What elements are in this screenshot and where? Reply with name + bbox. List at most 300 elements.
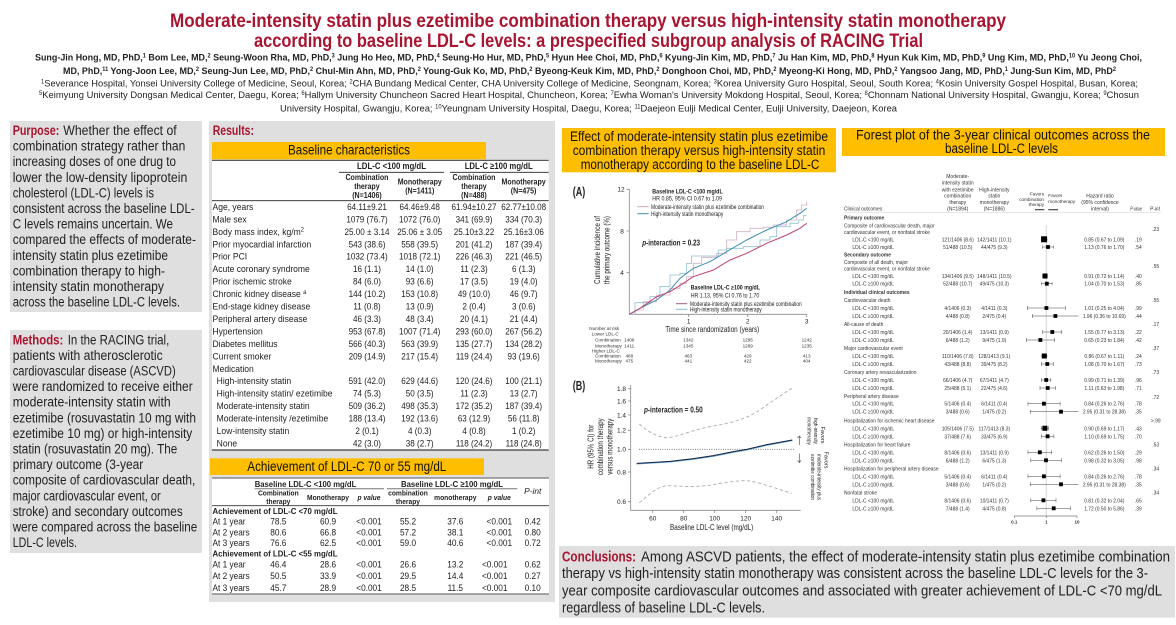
table: baseline characteristics: LDL-C ≥100 mg/dL: [465, 161, 533, 171]
forest column: combination events: 4/488 (0.8): [946, 314, 970, 320]
forest row labels: LDL-C ≥100 mg/dL: [852, 386, 894, 392]
forest column: p interaction: .72: [1152, 395, 1159, 401]
forest row labels: LDL-C <100 mg/dL: [852, 306, 894, 312]
achievement values: <0.001: [487, 527, 512, 538]
forest column: combination events: 6/488 (1.2): [946, 338, 970, 344]
column: combination LDL below 100: 543 (38.6): [349, 239, 386, 249]
axis tick labels: 1: [687, 318, 691, 325]
forest column: combination events: 121/1406 (8.6): [942, 237, 974, 243]
year labels: At 3 years: [212, 583, 250, 593]
heading: forest plot: Forest plot of the 3-year clinical outcomes across the: [856, 128, 1150, 142]
panel: purpose: combination strategy rather than: [13, 139, 185, 154]
table: achievement of LDL-C: Baseline LDL-C ≥100 mg/dL: [401, 479, 503, 489]
forest header: (95% confidence: [1081, 200, 1119, 206]
column: monotherapy LDL below 100: 153 (10.8): [401, 289, 438, 299]
forest header: intensity statin: [942, 180, 974, 187]
forest column: p value: .22: [1135, 330, 1142, 336]
forest header: High-intensity: [979, 187, 1010, 193]
axes: [628, 385, 801, 513]
forest column: combination events: 43/488 (8.8): [944, 362, 971, 368]
column: combination LDL below 100: 209 (14.9): [349, 351, 386, 361]
forest column: monotherapy events: 49/475 (10.3): [980, 281, 1009, 288]
forest column: p value: .54: [1135, 245, 1142, 251]
affiliations: University Hospital, Gwangju, Korea; 10Yeungnam University Hospital, Daegu, Korea; 11Daejeon Eulji Medical Center, Eulji University, Daejeon, Korea: [280, 103, 898, 114]
axis tick labels: 1.6: [617, 398, 626, 405]
column: monotherapy LDL below 100: 558 (39.5): [401, 239, 438, 249]
forest column: combination events: 5/1406 (0.4): [944, 401, 971, 408]
forest column: hazard ratios: 1.96 (0.36 to 10.69): [1083, 314, 1126, 320]
column: combination LDL below 100: 2 (0.1): [355, 426, 379, 436]
forest axis labels: 10: [1074, 520, 1080, 524]
column: monotherapy LDL below 100: 498 (35.3): [401, 401, 438, 411]
authors: MD, PhD,11 Yong-Joon Lee, MD,2 Seung-Jun Lee, MD, PhD,2 Chul-Min Ahn, MD, PhD,2 Young-Guk Ko, MD, PhD,2 Byeong-Keuk Kim, MD, PhD,2 Donghoon Choi, MD, PhD,2 Myeong-Ki Hong, MD, PhD,2 Yangsoo Jang, MD, PhD,1 Jung-Sun Kim, MD, PhD2: [63, 66, 1117, 77]
y axis title: the primary outcome (%): [602, 216, 611, 284]
forest column: combination events: 8/1406 (0.6): [944, 498, 971, 504]
forest row labels: LDL-C <100 mg/dL: [852, 401, 894, 408]
panel: methods: cardiovascular disease (ASCVD): [13, 364, 176, 378]
achievement values: 28.9: [320, 583, 336, 593]
achievement values: <0.001: [356, 571, 382, 581]
number at risk table: 475: [625, 359, 634, 364]
panel: methods: primary outcome (3-year: [13, 457, 144, 472]
table: achievement of LDL-C: Achievement of LDL-C <55 mg/dL: [212, 548, 338, 558]
forest row labels: LDL-C ≥100 mg/dL: [852, 458, 894, 464]
column: combination LDL below 100: [345, 201, 390, 449]
forest column: monotherapy events: 39/475 (8.2): [981, 362, 1008, 368]
row labels: High-intensity statin: [217, 376, 291, 386]
forest column: p value: .73: [1135, 362, 1142, 368]
table: baseline characteristics: therapy: [461, 182, 487, 191]
forest row labels: Peripheral artery disease: [844, 394, 899, 400]
number at risk table: 463: [684, 354, 693, 359]
table: baseline characteristics: (N=488): [461, 191, 487, 200]
achievement values: 14.4: [447, 571, 464, 581]
achievement values: 37.6: [447, 516, 464, 527]
table: baseline characteristics: (N=475): [511, 186, 537, 196]
forest column: combination events: 6/488 (1.2): [946, 458, 970, 464]
achievement values: <0.001: [356, 538, 382, 548]
achievement values: <0.001: [356, 583, 382, 593]
year labels: At 3 years: [212, 538, 250, 548]
column: combination LDL 100 or above: [452, 201, 497, 449]
forest column: hazard ratios: 0.98 (0.32 to 3.05): [1084, 458, 1125, 464]
forest plot: [844, 174, 1161, 525]
panel: methods: statin (rosuvastatin 20 mg). The: [13, 442, 177, 456]
number at risk table: 1408: [624, 338, 635, 343]
forest column: monotherapy events: 142/1411 (10.1): [977, 237, 1012, 243]
forest column: hazard ratios: 1.04 (0.70 to 1.53): [1084, 281, 1125, 288]
y axis title: Cumulative incidence of: [593, 215, 602, 284]
axis tick labels: [617, 186, 809, 325]
forest column: monotherapy events: 9/475 (1.9): [982, 338, 1006, 344]
forest row labels: LDL-C ≥100 mg/dL: [852, 245, 894, 251]
forest column: monotherapy events: 128/1413 (9.1): [978, 354, 1011, 360]
forest column: combination events: 25/488 (5.1): [944, 386, 971, 392]
annotation: favors combination: [809, 451, 828, 500]
forest header: [844, 174, 1161, 213]
forest column: hazard ratios: 1.72 (0.50 to 5.86): [1084, 506, 1125, 512]
authors: [35, 53, 1142, 77]
forest row labels: LDL-C <100 mg/dL: [852, 237, 894, 243]
column: monotherapy LDL 100 or above: 334 (70.3): [505, 214, 542, 225]
axis tick labels: 0.8: [617, 469, 626, 476]
row labels: Body mass index, kg/m2: [212, 227, 304, 237]
column: monotherapy LDL below 100: 4 (0.3): [408, 426, 432, 436]
panel: purpose: intensity statin plus ezetimibe: [13, 248, 168, 263]
column: combination LDL 100 or above: 201 (41.2): [456, 239, 493, 249]
forest column: combination events: 51/488 (10.5): [943, 245, 973, 251]
column: combination LDL 100 or above: 17 (3.5): [460, 276, 488, 287]
forest column: p value: .99: [1135, 306, 1142, 312]
column: combination LDL 100 or above: 118 (24.2): [456, 438, 492, 449]
panel: methods: Methods:: [13, 332, 63, 347]
forest column: hazard ratios: 0.90 (0.69 to 1.17): [1084, 426, 1125, 432]
column: monotherapy LDL below 100: 563 (39.9): [401, 338, 438, 349]
forest header: combination: [1019, 197, 1044, 202]
achievement values: <0.001: [482, 583, 508, 593]
forest row labels: LDL-C <100 mg/dL: [852, 274, 894, 280]
column: combination LDL 100 or above: 293 (60.0): [456, 326, 493, 337]
column: monotherapy LDL below 100: 13 (0.9): [406, 301, 434, 312]
axis tick labels: 80: [680, 516, 688, 523]
forest column: monotherapy events: 10/1411 (0.7): [980, 498, 1009, 504]
column: monotherapy LDL 100 or above: 1 (0.2): [512, 426, 536, 436]
forest column: p value: .85: [1135, 281, 1142, 288]
forest column: monotherapy events: 117/1413 (8.3): [978, 426, 1010, 432]
column: monotherapy LDL 100 or above: 56 (11.8): [508, 413, 540, 424]
column: monotherapy LDL 100 or above: 93 (19.6): [508, 351, 540, 361]
forest column: p interaction: >.99: [1151, 418, 1161, 424]
number at risk table: Number at risk: [589, 326, 620, 331]
forest column: monotherapy events: 44/475 (9.3): [981, 245, 1008, 251]
achievement values: [270, 516, 541, 593]
year labels: [212, 516, 250, 593]
column: monotherapy LDL below 100: 64.46±9.48: [399, 201, 440, 212]
chart A: cumulative incidence curves: [573, 185, 812, 364]
forest row labels: Hospitalization for ischemic heart disease: [844, 418, 935, 424]
forest header: interval): [1091, 206, 1109, 213]
row labels: Current smoker: [212, 351, 271, 361]
column: combination LDL below 100: 509 (36.2): [349, 401, 386, 411]
forest row labels: LDL-C ≥100 mg/dL: [852, 362, 894, 368]
panel: methods: In the RACING trial,: [68, 332, 169, 347]
row labels: Low-intensity statin: [217, 426, 289, 436]
axis tick labels: 140: [771, 516, 783, 523]
achievement values: 60.9: [320, 516, 336, 527]
table: baseline characteristics: [212, 160, 549, 450]
annotation: LDL 100 or above legend: HR 1.13, 95% CI 0.76 to 1.70: [691, 294, 760, 300]
column: combination LDL below 100: 144 (10.2): [349, 289, 386, 299]
column: monotherapy LDL below 100: 14 (1.0): [406, 264, 434, 274]
table: baseline characteristics: (N=1406): [352, 191, 382, 200]
column: combination LDL below 100: 11 (0.8): [353, 301, 381, 312]
forest column: p interaction: .53: [1152, 442, 1159, 448]
number at risk table: 1235: [802, 343, 812, 348]
achievement values: 11.5: [448, 583, 463, 593]
row labels: Moderate-intensity /ezetimibe: [217, 413, 328, 424]
table: baseline characteristics: (N=1411): [405, 186, 435, 196]
panel: purpose: [10, 121, 202, 312]
forest column: p interaction: [1151, 227, 1161, 496]
axis tick labels: 100: [709, 516, 721, 523]
forest column: p value: .40: [1135, 274, 1142, 280]
table: achievement of LDL-C: p value: [487, 494, 511, 502]
forest column: combination events: 37/488 (7.6): [944, 434, 971, 440]
forest column: combination events: 66/1406 (4.7): [943, 378, 973, 384]
table: achievement of LDL-C: [212, 478, 549, 594]
number at risk table: [589, 326, 812, 364]
panel letter B: (B): [573, 379, 585, 393]
annotation: favors combination: ezetimibe combination: [809, 454, 815, 500]
forest column: monotherapy events: 6/1411 (0.4): [981, 401, 1008, 408]
forest column: hazard ratios: 1.10 (0.69 to 1.75): [1084, 434, 1125, 440]
forest row labels: LDL-C <100 mg/dL: [852, 354, 894, 360]
results heading: Results:: [213, 123, 254, 138]
column: combination LDL 100 or above: 11 (2.3): [460, 264, 488, 274]
annotation: favors high-intensity: Favors: [819, 426, 825, 444]
achievement values: <0.001: [482, 571, 508, 581]
annotation: LDL 100 or above legend: Baseline LDL-C ≥100 mg/dL: [691, 286, 760, 292]
achievement values: <0.001: [482, 559, 508, 570]
column: combination LDL 100 or above: 20 (4.1): [460, 314, 488, 324]
panel: purpose: C levels remains uncertain. We: [13, 217, 173, 232]
number at risk table: 441: [684, 359, 693, 364]
panel: purpose: Purpose:: [13, 123, 59, 138]
forest column: p value: .71: [1135, 386, 1142, 392]
forest column: combination events: 105/1406 (7.5): [942, 426, 974, 432]
forest column: p interaction: .17: [1152, 322, 1159, 328]
panel: methods: patients with atherosclerotic: [13, 348, 163, 363]
forest column: hazard ratios: 0.85 (0.67 to 1.09): [1084, 237, 1125, 243]
forest column: p interaction: .37: [1152, 346, 1159, 352]
forest header: Moderate-: [946, 174, 969, 180]
column: combination LDL below 100: 953 (67.8): [349, 326, 386, 337]
column: monotherapy LDL below 100: 93 (6.6): [406, 276, 434, 287]
forest column: hazard ratios: 2.95 (0.31 to 28.38): [1083, 482, 1126, 488]
forest row labels: Secondary outcome: [844, 252, 891, 259]
panel: conclusions: regardless of baseline LDL-C levels.: [562, 600, 765, 616]
number at risk table: Monotherapy: [595, 343, 623, 348]
forest header: statin: [988, 193, 1000, 200]
number at risk table: 1295: [743, 338, 753, 343]
forest column: hazard ratios: 0.62 (0.26 to 1.50): [1084, 450, 1125, 456]
row labels: None: [217, 438, 237, 449]
column: combination LDL 100 or above: 119 (24.4): [456, 351, 492, 361]
forest column: p interaction: .34: [1152, 466, 1159, 472]
achievement values: 46.4: [270, 559, 287, 570]
forest axis labels: 1: [1045, 520, 1048, 524]
number at risk table: 1411: [624, 343, 635, 348]
forest column: monotherapy events: 67/1411 (4.7): [980, 378, 1009, 384]
row labels: High-intensity statin/ ezetimibe: [217, 388, 333, 399]
axis tick labels: 1.8: [617, 386, 626, 393]
axes: [626, 189, 807, 317]
column: monotherapy LDL below 100: 192 (13.6): [401, 413, 438, 424]
column: monotherapy LDL below 100: 25.06 ± 3.05: [397, 226, 442, 237]
forest column: hazard ratios: [1083, 237, 1126, 512]
heading: baseline characteristics: [212, 142, 486, 159]
year labels: At 2 years: [212, 527, 250, 538]
number at risk table: Monotherapy: [595, 359, 623, 364]
forest column: p value: .35: [1135, 482, 1142, 488]
affiliations: 5Keimyung University Dongsan Medical Center, Daegu, Korea; 6Hallym University Chuncheon Sacred Heart Hospital, Chuncheon, Korea; 7Ewha Woman's University Mokdong Hospital, Seoul, Korea; 8Chonnam National University Hospital, Gwangju, Korea; 9Chosun: [39, 90, 1139, 101]
axis tick labels: 1.0: [617, 447, 626, 454]
forest row labels: LDL-C ≥100 mg/dL: [852, 506, 894, 512]
achievement values: 0.42: [525, 516, 541, 527]
forest column: p value: .39: [1135, 506, 1142, 512]
forest header: combination: [944, 193, 971, 200]
column: combination LDL 100 or above: 120 (24.6): [456, 376, 493, 386]
annotation: LDL below 100 legend: Moderate-intensity statin plus ezetimibe combination: [651, 205, 764, 211]
forest column: monotherapy events: 4/475 (0.8): [982, 506, 1006, 512]
column: combination LDL below 100: 84 (6.0): [353, 276, 381, 287]
forest row labels: Primary outcome: [844, 215, 884, 221]
achievement values: 29.5: [400, 571, 416, 581]
forest row labels: LDL-C <100 mg/dL: [852, 330, 894, 336]
column: combination LDL 100 or above: 135 (27.7): [456, 338, 493, 349]
column: monotherapy LDL below 100: 1072 (76.0): [399, 214, 441, 225]
forest column: p value: .43: [1135, 426, 1142, 432]
forest row labels: Hospitalization for peripheral artery disease: [844, 466, 939, 472]
forest row labels: LDL-C <100 mg/dL: [852, 450, 894, 456]
y axis title: [586, 418, 614, 475]
forest row labels: LDL-C ≥100 mg/dL: [852, 434, 894, 440]
forest column: monotherapy events: 1/475 (0.2): [982, 482, 1006, 488]
table: baseline characteristics: therapy: [354, 182, 380, 191]
achievement values: 28.6: [320, 559, 336, 570]
forest column: combination events: 134/1406 (9.5): [942, 274, 974, 280]
column: combination LDL below 100: 566 (40.3): [349, 338, 386, 349]
y axis title: [593, 215, 611, 284]
forest column: monotherapy events: 1/475 (0.2): [982, 409, 1006, 416]
title: [170, 11, 1006, 52]
heading: forest plot: baseline LDL-C levels: [945, 141, 1058, 156]
panel: methods: were randomized to receive either: [12, 379, 193, 394]
forest row labels: LDL-C ≥100 mg/dL: [852, 482, 894, 488]
affiliations: [39, 79, 1139, 114]
panel: methods: moderate-intensity statin with: [13, 395, 171, 410]
forest column: hazard ratios: 0.99 (0.71 to 1.39): [1084, 378, 1125, 384]
forest column: hazard ratios: 0.86 (0.67 to 1.11): [1084, 354, 1124, 360]
forest row labels: LDL-C <100 mg/dL: [852, 498, 894, 504]
forest row labels: LDL-C ≥100 mg/dL: [852, 281, 894, 288]
forest column: p value: .70: [1135, 434, 1142, 440]
panel: purpose: intensity statin monotherapy: [13, 279, 164, 294]
column: combination LDL below 100: 16 (1.1): [353, 264, 381, 274]
forest column: hazard ratios: 1.13 (0.76 to 1.70): [1084, 245, 1125, 251]
column: combination LDL below 100: 46 (3.3): [353, 314, 381, 324]
row labels: Prior myocardial infarction: [212, 239, 311, 249]
forest row labels: LDL-C ≥100 mg/dL: [852, 409, 894, 416]
column: combination LDL 100 or above: 226 (46.3): [456, 251, 493, 262]
column: monotherapy LDL 100 or above: 21 (4.4): [510, 314, 538, 324]
panel: purpose: consistent across the baseline LDL-: [13, 201, 195, 216]
panel: methods: ezetimibe (rosuvastatin 10 mg with: [13, 410, 196, 425]
column: monotherapy LDL below 100: [397, 201, 442, 449]
table: achievement of LDL-C: Monotherapy: [307, 494, 349, 502]
forest row labels: Cardiovascular death: [844, 298, 891, 304]
achievement values: 0.72: [525, 538, 541, 548]
column: monotherapy LDL 100 or above: 13 (2.7): [510, 388, 538, 399]
achievement values: <0.001: [356, 516, 382, 527]
column: combination LDL below 100: 1032 (73.4): [346, 251, 388, 262]
column: monotherapy LDL 100 or above: 100 (21.1): [505, 376, 542, 386]
forest row labels: LDL-C <100 mg/dL: [852, 474, 894, 480]
axis tick labels: [617, 386, 783, 523]
column: monotherapy LDL 100 or above: 187 (39.4): [505, 401, 542, 411]
achievement values: 78.5: [270, 516, 287, 527]
table: baseline characteristics: Monotherapy: [398, 177, 443, 187]
annotation: LDL 100 or above legend: [676, 286, 802, 314]
column: monotherapy LDL 100 or above: 46 (9.7): [510, 289, 538, 299]
x axis title: Time since randomization (years): [665, 325, 760, 334]
curves: [629, 202, 807, 314]
achievement values: <0.001: [356, 527, 382, 538]
forest column: p value: .19: [1135, 237, 1142, 243]
forest row labels: Major cardiovascular event: [844, 346, 903, 352]
column: monotherapy LDL below 100: 38 (2.7): [406, 438, 434, 449]
forest row labels: Coronary artery revascularization: [844, 370, 917, 376]
y axis title: HR (95% CI) for: [586, 424, 596, 469]
achievement values: 55.2: [400, 516, 416, 527]
forest column: hazard ratios: 1.08 (0.70 to 1.67): [1084, 362, 1125, 368]
forest row labels: LDL-C ≥100 mg/dL: [852, 314, 894, 320]
affiliations: 1Severance Hospital, Yonsei University College of Medicine, Seoul, Korea; 2CHA Bundang Medical Center, CHA University College of Medicine, Seongnam, Korea; 3Korea University Guro Hospital, Seoul, South Korea; 4Kosin University Gospel Hospital, Busan, Korea;: [41, 79, 1138, 90]
achievement values: 66.8: [320, 527, 336, 538]
column: combination LDL 100 or above: 25.10±3.22: [454, 226, 494, 237]
axis tick labels: 60: [649, 516, 657, 523]
achievement values: 26.6: [400, 559, 416, 570]
column: monotherapy LDL below 100: 1018 (72.1): [399, 251, 441, 262]
column: combination LDL below 100: 591 (42.0): [349, 376, 386, 386]
annotation: favors high-intensity: monotherapy: [806, 417, 812, 445]
column: monotherapy LDL below 100: 1007 (71.4): [399, 326, 441, 337]
achievement values: 28.5: [400, 583, 416, 593]
forest column: combination events: 110/1406 (7.8): [942, 354, 974, 360]
forest row labels: Nonfatal stroke: [844, 490, 877, 496]
forest column: p value: .78: [1135, 474, 1142, 480]
panel: conclusions: Conclusions:: [562, 550, 636, 566]
forest header: (N=1894): [947, 206, 968, 213]
forest column: monotherapy events: 2/475 (0.4): [982, 314, 1006, 320]
forest column: combination events: 3/488 (0.6): [946, 482, 970, 488]
forest column: monotherapy events: 13/1411 (0.9): [980, 330, 1009, 336]
forest column: p value: .78: [1135, 401, 1142, 408]
table: achievement of LDL-C: monotherapy: [434, 494, 476, 502]
y axis title: versus monotherapy: [605, 419, 614, 475]
forest column: monotherapy events: [977, 237, 1012, 512]
axis tick labels: 3: [805, 318, 809, 325]
table: achievement of LDL-C: Baseline LDL-C <100 mg/dL: [255, 479, 356, 489]
annotation: p-interaction A: p-interaction = 0.23: [642, 239, 700, 248]
annotation: LDL below 100 legend: Baseline LDL-C <100 mg/dL: [652, 190, 723, 196]
achievement values: 40.6: [447, 538, 464, 548]
row labels: Age, years: [212, 202, 254, 212]
number at risk table: 422: [744, 359, 752, 364]
number at risk table: Combination: [595, 354, 621, 359]
forest column: hazard ratios: 0.81 (0.32 to 2.04): [1084, 498, 1125, 504]
column: monotherapy LDL 100 or above: [501, 201, 546, 449]
forest column: p interaction: .73: [1152, 370, 1159, 376]
row labels: Male sex: [212, 214, 247, 224]
forest column: combination events: 20/1406 (1.4): [943, 330, 973, 336]
forest row labels: Hospitalization for heart failure: [844, 442, 911, 448]
table: baseline characteristics: Combination: [346, 173, 389, 182]
column: combination LDL below 100: 74 (5.3): [353, 388, 381, 399]
table: achievement of LDL-C: Combination: [258, 489, 299, 498]
forest header: (N=1886): [984, 206, 1005, 213]
axis tick labels: 0.6: [617, 499, 626, 506]
